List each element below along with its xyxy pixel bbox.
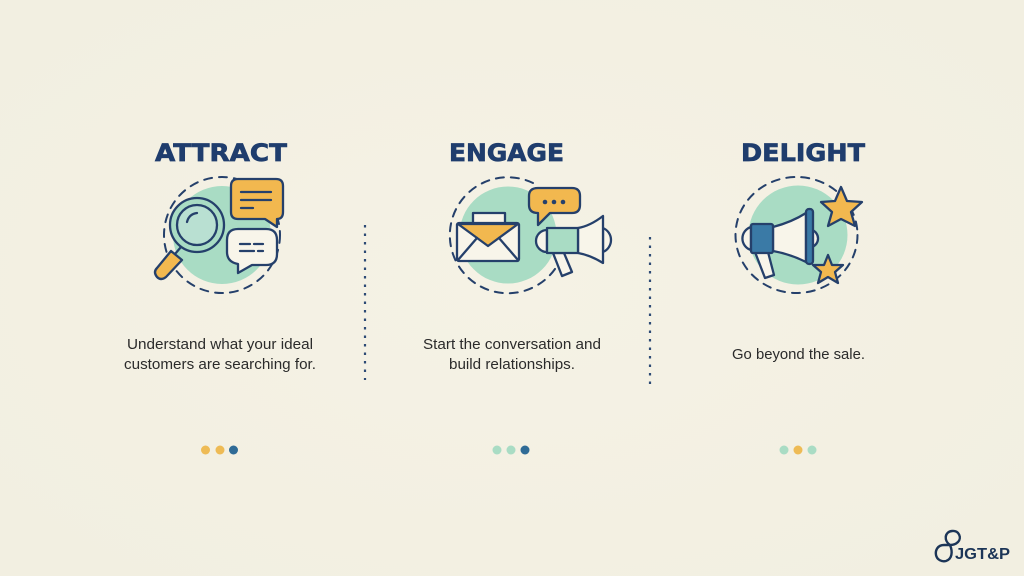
text: engage description: Start the conversation and <box>423 337 601 353</box>
logo: JGT&P <box>936 531 1010 563</box>
heading: attract: ATTRACT <box>155 139 288 167</box>
progress dots: delight <box>780 446 816 454</box>
heading: engage: ENGAGE <box>449 139 564 167</box>
divider: right <box>649 237 651 386</box>
text: engage description: build relationships. <box>449 357 575 373</box>
text: attract description: Understand what your ideal <box>127 337 313 353</box>
icon: megaphone and stars <box>736 177 862 293</box>
logo: JGT&P: JGT&P <box>955 546 1010 563</box>
panel: delight <box>732 139 866 454</box>
text: attract description: customers are searching for. <box>124 357 316 373</box>
text: engage description <box>423 337 601 373</box>
progress dots: attract <box>201 446 238 454</box>
progress dots: engage <box>492 446 530 454</box>
heading: delight: DELIGHT <box>741 139 866 167</box>
panel: engage <box>423 139 611 454</box>
text: attract description <box>124 337 316 373</box>
icon: magnifier and speech bubbles <box>155 177 283 293</box>
text: delight description: Go beyond the sale. <box>732 347 865 363</box>
panel: attract <box>124 139 316 454</box>
icon: envelope, bubble and megaphone <box>450 177 611 293</box>
divider: left <box>364 225 366 380</box>
